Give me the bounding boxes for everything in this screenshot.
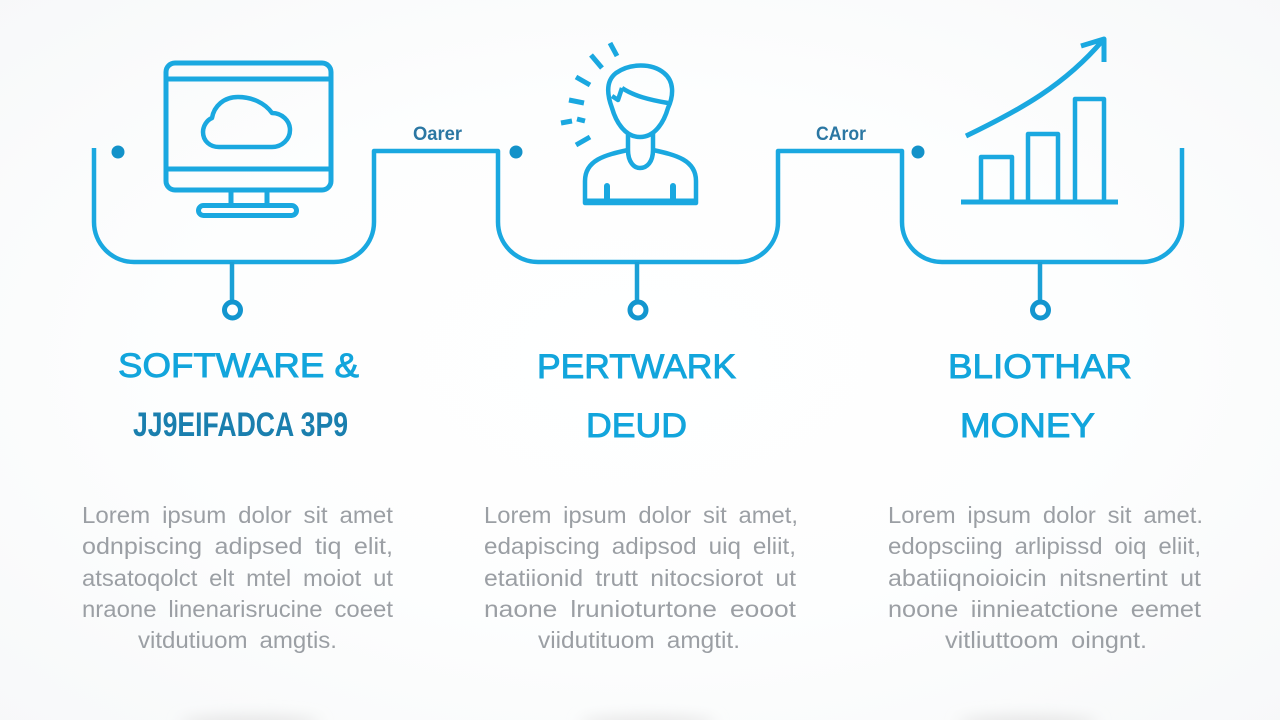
- small label 1: Oarer: [413, 124, 463, 145]
- stem and node 3: [1032, 262, 1048, 318]
- body text 3: Lorem ipsum dolor sit amet.: [888, 502, 1203, 528]
- column 2: person: [484, 43, 798, 653]
- body text 2: [484, 502, 798, 653]
- body text 2: viidutituom amgtit.: [538, 627, 740, 653]
- heading 2: PERTWARK: [537, 348, 736, 386]
- body text 1: vitdutiuom amgtis.: [138, 627, 337, 653]
- body text 1: nraone linenarisrucine coeet: [82, 596, 394, 622]
- body text 2: etatiionid trutt nitocsiorot ut: [484, 565, 797, 591]
- connector line: [94, 148, 1182, 262]
- marker dot 2: [510, 146, 522, 158]
- column 3: growth: [888, 39, 1203, 653]
- marker dot 3: [912, 146, 924, 158]
- heading 3: BLIOTHAR: [948, 348, 1132, 386]
- heading 2: DEUD: [586, 407, 687, 445]
- body text 2: naone lrunioturtone eooot: [484, 596, 797, 622]
- body text 1: odnpiscing adipsed tiq elit,: [82, 533, 393, 559]
- heading 3: MONEY: [960, 407, 1095, 445]
- body text 2: Lorem ipsum dolor sit amet,: [484, 502, 798, 528]
- heading 2: [537, 348, 736, 445]
- icon: person with rays: [561, 43, 696, 203]
- body text 1: [82, 502, 394, 653]
- heading 1: JJ9EIFADCA 3P9: [133, 406, 348, 444]
- stem and node 1: [224, 262, 240, 318]
- heading 1: [118, 347, 359, 444]
- body text 3: vitliuttoom oingnt.: [945, 627, 1147, 653]
- body text 3: noone iinnieatctione eemet: [888, 596, 1202, 622]
- body text 2: edapiscing adipsod uiq eliit,: [484, 533, 796, 559]
- body text 3: [888, 502, 1203, 653]
- icon: monitor with cloud: [166, 63, 331, 216]
- heading 1: SOFTWARE &: [118, 347, 359, 385]
- body text 3: abatiiqnoioicin nitsnertint ut: [888, 565, 1202, 591]
- body text 1: atsatoqolct elt mtel moiot ut: [82, 565, 394, 591]
- small label 2: CAror: [816, 124, 867, 145]
- icon: bar chart with rising arrow: [961, 39, 1118, 202]
- stem and node 2: [630, 262, 646, 318]
- body text 1: Lorem ipsum dolor sit amet: [82, 502, 394, 528]
- marker dot 1: [112, 146, 124, 158]
- column 1: software: [82, 63, 394, 653]
- body text 3: edopsciing arlipissd oiq eliit,: [888, 533, 1201, 559]
- heading 3: [948, 348, 1132, 445]
